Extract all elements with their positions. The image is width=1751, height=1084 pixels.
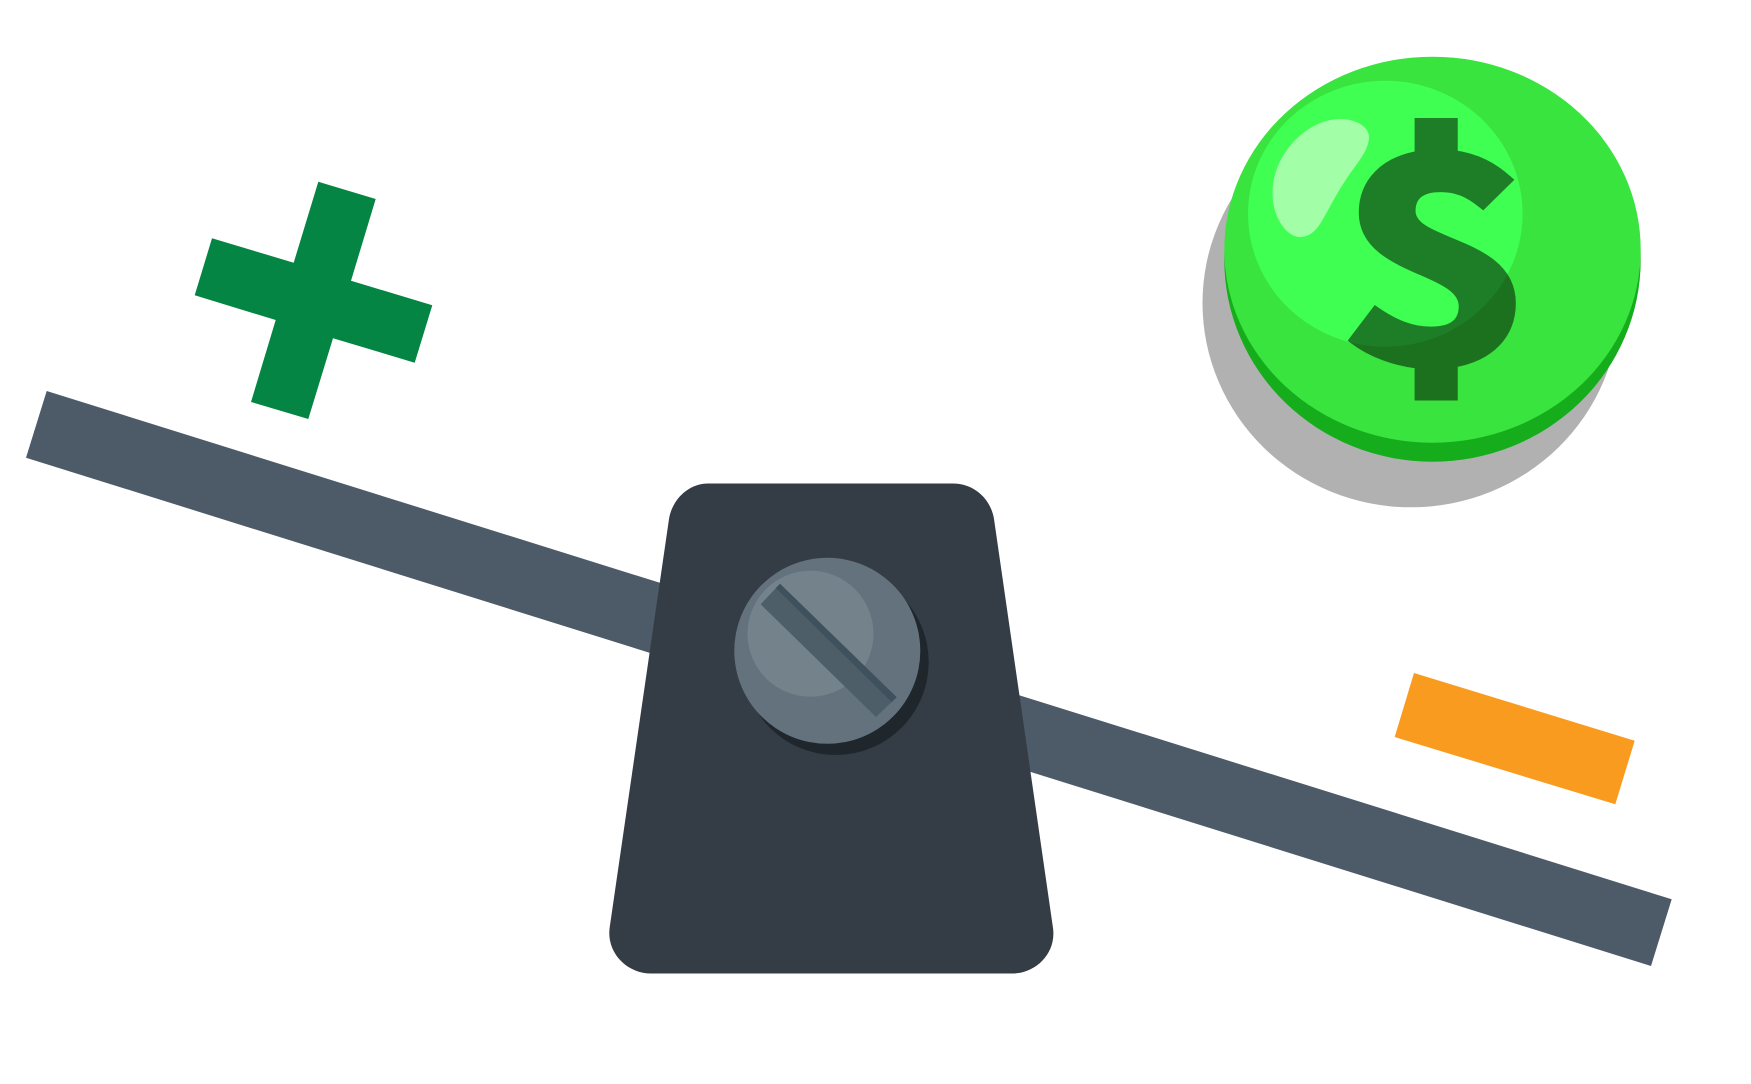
coin shadow xyxy=(1202,99,1620,507)
screw shadow xyxy=(743,569,929,755)
pivot screw xyxy=(734,558,929,755)
icon: dollar coin xyxy=(1202,35,1641,507)
icon: minus sign xyxy=(1395,673,1635,804)
seesaw base with pivot screw xyxy=(609,484,1053,974)
coin inner highlight xyxy=(1248,81,1523,347)
coin rim xyxy=(1224,58,1641,462)
screw slot xyxy=(761,584,897,717)
screw head xyxy=(734,558,920,744)
dollar symbol: $ xyxy=(1339,35,1533,443)
screw highlight xyxy=(748,571,874,697)
seesaw beam xyxy=(26,391,1672,966)
icon: plus sign xyxy=(195,182,432,419)
coin face xyxy=(1224,57,1641,443)
base trapezoid xyxy=(609,484,1053,974)
coin gloss xyxy=(1272,119,1369,237)
